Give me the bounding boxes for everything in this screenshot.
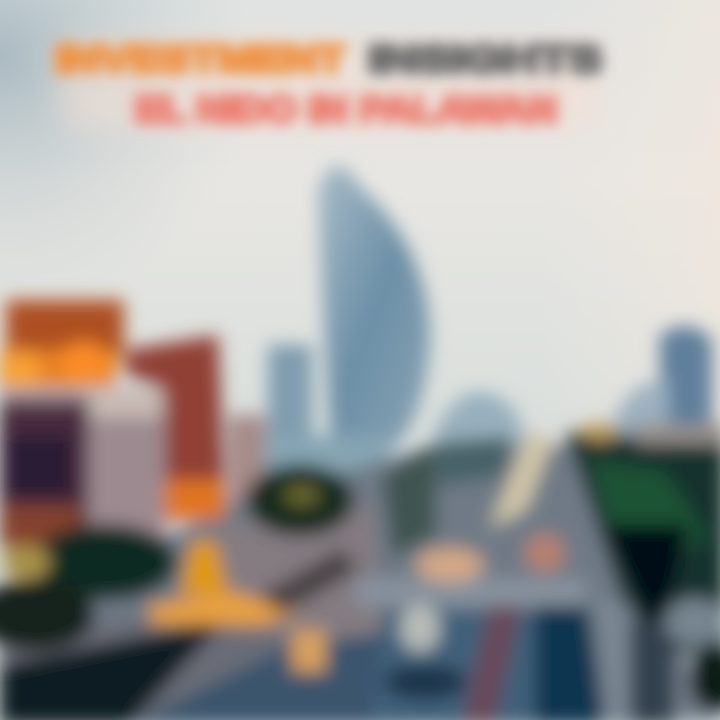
left orange building bbox=[0, 300, 124, 386]
title block bbox=[55, 39, 602, 130]
distant skyline bbox=[228, 326, 712, 520]
road surface bbox=[0, 445, 720, 720]
central round tree bbox=[246, 464, 354, 536]
title line 1 orange: INVESTMENT bbox=[55, 39, 345, 81]
yellow road glow bbox=[150, 540, 358, 672]
title line 2 red: EL NIDO IN PALAWAN bbox=[135, 89, 557, 130]
central glass tower bbox=[265, 166, 430, 482]
title glow bbox=[60, 40, 600, 130]
right trees bbox=[565, 423, 720, 720]
mid street trees bbox=[382, 436, 510, 558]
left green trees bbox=[0, 524, 177, 651]
title line 1 grey: INSIGHTS bbox=[368, 39, 602, 81]
blurred city scene bbox=[0, 166, 720, 720]
red brick tower bbox=[126, 335, 226, 520]
road light streak and signs bbox=[416, 432, 565, 582]
left dark facade building bbox=[0, 388, 165, 547]
